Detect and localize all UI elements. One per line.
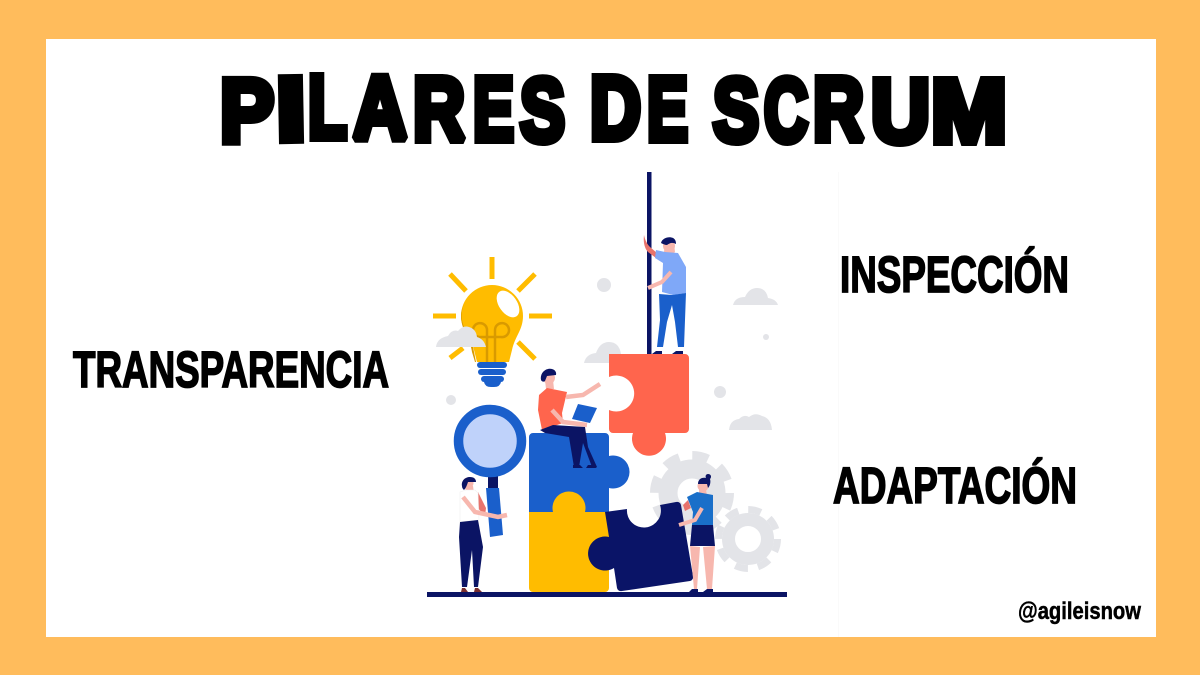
person standing on puzzle [644, 235, 686, 354]
title [220, 58, 1007, 162]
icon: light bulb [433, 257, 552, 387]
person sitting with laptop [538, 369, 600, 468]
puzzle piece: yellow [529, 491, 609, 592]
label: inspeccion: INSPECCIÓN [840, 246, 1069, 303]
ground line [427, 592, 787, 597]
title: R [413, 60, 465, 160]
title: C [764, 61, 808, 161]
illustration: teamwork puzzle [427, 172, 787, 597]
handle: agileisnow: @agileisnow [1018, 598, 1141, 625]
pole [647, 172, 652, 354]
title: M [931, 62, 1007, 162]
title: I [275, 60, 307, 160]
title: R [813, 60, 864, 160]
title: P [220, 62, 274, 162]
person pushing puzzle [679, 474, 715, 592]
puzzle piece: blue [529, 433, 630, 512]
title: L [308, 58, 347, 158]
magnifying glass [458, 410, 522, 537]
title: S [520, 61, 565, 161]
title: D [590, 59, 641, 159]
title: S [713, 61, 759, 161]
title: A [353, 59, 407, 159]
label: adaptacion: ADAPTACIÓN [833, 457, 1077, 514]
puzzle piece: red [609, 354, 689, 456]
label: transparencia: TRANSPARENCIA [73, 341, 389, 398]
title: E [647, 60, 688, 160]
title: U [871, 62, 930, 162]
title: E [473, 60, 514, 160]
person with magnifying glass [459, 477, 507, 592]
puzzle piece: navy [588, 502, 693, 591]
background gears [655, 456, 778, 568]
background clouds and dots [446, 278, 778, 430]
